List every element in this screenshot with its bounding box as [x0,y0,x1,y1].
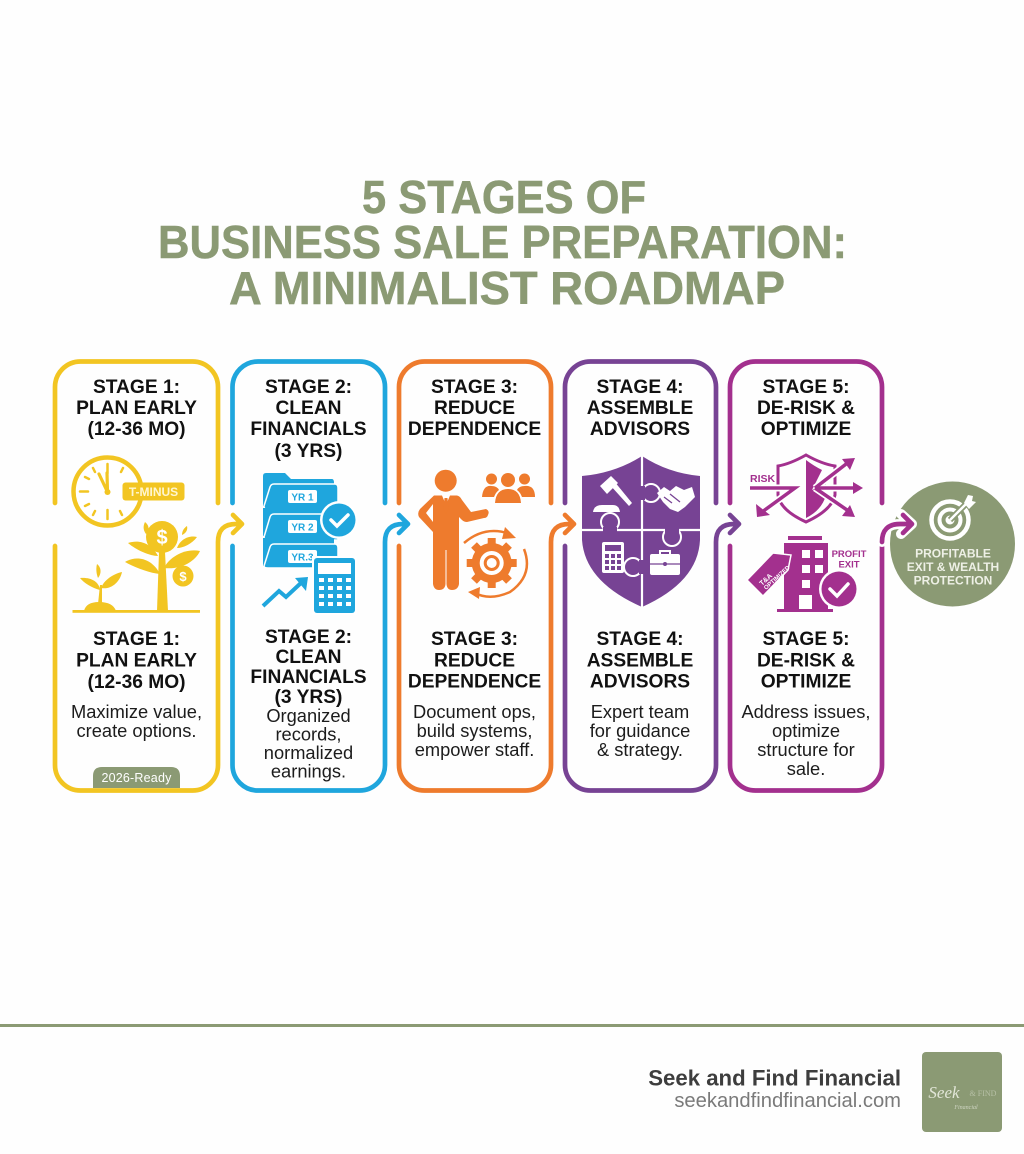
text: stage 3 description: empower staff. [415,739,534,760]
icon: money tree and sprout: $ [156,527,168,549]
icon: building with price tag and check: PROFIT [832,549,867,560]
icon: folders, check, calculator and growth arrow: YR.3 [291,552,314,564]
footer logo: & FIND [970,1089,997,1098]
footer logo: Financial [953,1105,978,1111]
icon: folders, check, calculator and growth arrow [263,473,358,615]
heading: stage 1 top: STAGE 1: [93,377,180,398]
title: BUSINESS SALE PREPARATION: [158,216,847,268]
panel: stage 3 reduce dependence [399,362,574,790]
heading: stage 2 lower: CLEAN [275,647,342,668]
heading: stage 5 lower: STAGE 5: [762,629,850,650]
card outline and arrow: stage 4 [565,362,739,790]
heading: stage 4 top: ASSEMBLE [587,398,694,419]
text: outcome label: EXIT & WEALTH [907,560,999,574]
heading: stage 5 lower: OPTIMIZE [761,672,852,692]
heading: stage 4 lower: ADVISORS [590,672,690,692]
text: stage 3 description: Document ops, [413,701,536,722]
card outline: stage 5 [730,362,900,790]
heading: stage 1 top: PLAN EARLY [76,398,197,419]
heading: stage 4 top: ADVISORS [590,419,690,440]
title: A MINIMALIST ROADMAP [229,262,785,314]
heading: stage 1 lower: (12-36 MO) [87,672,186,693]
footer brand: seekandfindfinancial.com [674,1090,901,1112]
heading: stage 3 top: STAGE 3: [431,377,518,398]
title: 5 STAGES OF [362,171,646,223]
icon: building with price tag and check: T&A [759,573,774,587]
icon: folders, check, calculator and growth arrow: YR 1 [291,492,314,504]
heading: stage 5 top: DE-RISK & [757,398,855,419]
heading: stage 3 lower: DEPENDENCE [408,672,541,692]
icon: clock with t-minus badge [74,458,184,526]
icon: building with price tag and check [747,536,867,612]
text: stage 4 description: & strategy. [597,739,683,760]
heading: stage 3 top: DEPENDENCE [408,419,541,440]
icon: team of three [482,473,535,503]
heading: stage 2 top: FINANCIALS [250,419,367,440]
icon: gear with cycle arrows [464,527,527,599]
icon: clock with t-minus badge: T-MINUS [129,485,178,499]
panel: stage 1 plan early [55,362,242,790]
heading: stage 3 lower: REDUCE [434,650,515,672]
text: stage 2 description: earnings. [271,760,346,782]
panel: stage 5 de-risk and optimize [730,362,900,790]
outcome circle: profitable exit and wealth protection [882,482,1015,606]
footer brand [648,1066,901,1112]
heading: stage 5 lower: DE-RISK & [757,650,855,672]
heading: stage 1 lower: PLAN EARLY [76,650,197,672]
icon: risk shield with deflecting arrows: RISK [750,473,776,485]
heading: stage 2 lower: STAGE 2: [265,627,352,648]
icon: risk shield with deflecting arrows [750,455,863,522]
heading: stage 5 top: STAGE 5: [762,377,850,398]
footer brand: Seek and Find Financial [648,1066,901,1090]
heading: stage 2 lower: (3 YRS) [275,687,342,708]
heading: stage 4 top: STAGE 4: [596,377,684,398]
card outline and arrow: stage 3 [399,362,574,790]
text: outcome label: PROTECTION [914,574,992,588]
icon: money tree and sprout: $ [179,569,187,584]
text: stage 1 description: Maximize value, [71,701,202,722]
card outline and arrow: stage 2 [232,362,408,790]
heading: stage 1 lower: STAGE 1: [93,629,180,650]
icon: business person [418,470,489,590]
text: stage 2 description: normalized [264,742,353,763]
heading: stage 2 top: CLEAN [275,398,342,419]
panel: stage 4 assemble advisors [565,362,739,790]
text: stage 2 description: Organized [266,705,351,726]
text: stage 5 description: Address issues, [741,701,871,722]
text: stage 2 description: records, [275,724,342,744]
text: stage 5 description: optimize [772,720,840,741]
panel: stage 2 clean financials [232,362,408,790]
arrow into outcome circle [882,514,912,542]
icon: building with price tag and check: EXIT [838,560,860,570]
icon: folders, check, calculator and growth arrow: YR 2 [291,522,314,534]
icon: building with price tag and check: OPTIMIZED [763,565,792,591]
text: stage 1 description: create options. [77,720,196,741]
heading: stage 2 top: (3 YRS) [275,441,342,462]
heading: stage 5 top: OPTIMIZE [761,419,852,440]
footer logo [922,1052,1002,1132]
title [158,171,847,314]
footer logo: Seek [928,1083,960,1102]
heading: stage 4 lower: STAGE 4: [596,629,684,650]
text: stage 5 description: sale. [787,758,825,779]
heading: stage 3 lower: STAGE 3: [431,629,518,650]
icon: gavel [593,476,632,512]
icon: puzzle shield with advisors [582,456,700,607]
heading: stage 1 top: (12-36 MO) [87,419,186,440]
icon: calculator [602,542,624,573]
icon: handshake [657,486,695,512]
text: outcome label: PROFITABLE [915,546,991,560]
icon: money tree and sprout [72,521,200,613]
text: stage 4 description: Expert team [591,701,689,722]
badge: 2026-ready: 2026-Ready [101,771,172,785]
text: stage 3 description: build systems, [417,720,532,741]
icon: briefcase [650,551,680,575]
heading: stage 4 lower: ASSEMBLE [587,650,694,672]
card outline and arrow: stage 1 [55,362,242,790]
text: stage 5 description: structure for [757,739,855,760]
text: stage 4 description: for guidance [590,720,690,741]
heading: stage 2 top: STAGE 2: [265,377,352,398]
heading: stage 2 lower: FINANCIALS [250,667,367,688]
heading: stage 3 top: REDUCE [434,398,515,419]
icon: target with arrow [932,495,976,538]
badge: 2026-ready [93,767,180,788]
